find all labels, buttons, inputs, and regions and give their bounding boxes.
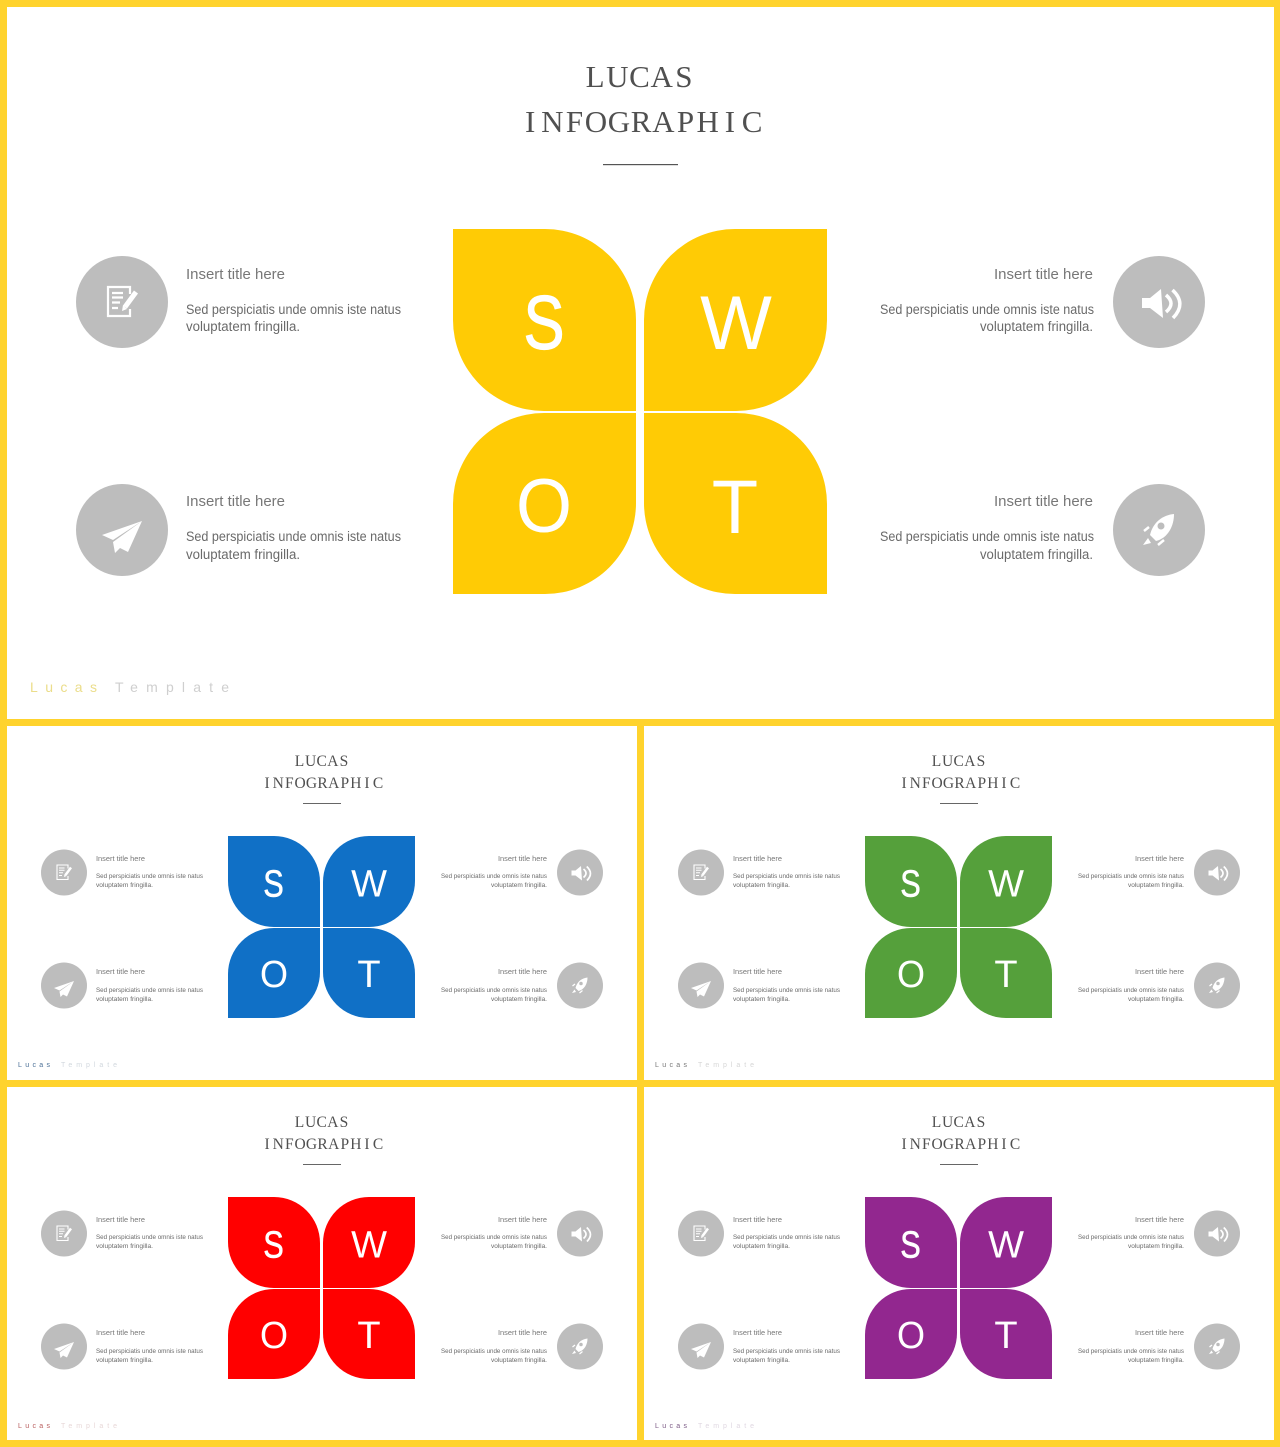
SWOT flower: O xyxy=(516,464,572,549)
text block: top left xyxy=(186,266,401,334)
text block: bottom right: Sed perspiciatis unde omnis iste natus xyxy=(1078,987,1185,994)
text block: bottom left: Insert title here xyxy=(96,1328,145,1337)
SWOT flower: O xyxy=(260,1315,288,1357)
SWOT flower: W xyxy=(351,864,387,906)
title: INFOGRAPHIC xyxy=(902,775,1020,792)
text block: bottom left xyxy=(96,967,204,1003)
text block: bottom left: voluptatem fringilla. xyxy=(96,1357,153,1364)
text block: top right: voluptatem fringilla. xyxy=(491,882,547,889)
footer: Template xyxy=(61,1423,117,1430)
title xyxy=(264,1114,383,1153)
text block: bottom left: Sed perspiciatis unde omnis iste natus xyxy=(96,987,204,994)
text block: top right xyxy=(441,854,548,889)
SWOT flower xyxy=(453,229,827,594)
footer xyxy=(18,1423,117,1430)
icon: document and pen xyxy=(76,256,168,348)
icon: paper plane xyxy=(678,962,724,1008)
text block: top left xyxy=(96,854,204,889)
text block: top left: Insert title here xyxy=(733,854,782,863)
SWOT flower xyxy=(228,1197,415,1379)
text block: bottom right: voluptatem fringilla. xyxy=(491,1357,547,1364)
footer: Template xyxy=(61,1062,117,1069)
text block: bottom right xyxy=(441,967,548,1003)
footer xyxy=(18,1062,117,1069)
SWOT flower xyxy=(228,836,415,1018)
text block: top left xyxy=(96,1215,204,1250)
text block: top right: Sed perspiciatis unde omnis iste natus xyxy=(1078,1234,1185,1241)
text block: bottom right: Sed perspiciatis unde omnis iste natus xyxy=(441,1348,548,1355)
title: LUCAS xyxy=(932,1114,985,1131)
text block: bottom right: voluptatem fringilla. xyxy=(980,547,1093,562)
text block: top right: Insert title here xyxy=(498,1215,547,1224)
icon: document and pen xyxy=(678,850,724,896)
title: LUCAS xyxy=(295,753,348,770)
footer xyxy=(655,1423,754,1430)
SWOT flower xyxy=(865,836,1052,1018)
text block: top left: Sed perspiciatis unde omnis iste natus xyxy=(96,873,204,880)
text block: top left xyxy=(733,1215,841,1250)
title xyxy=(264,753,383,792)
title: INFOGRAPHIC xyxy=(264,1136,383,1153)
text block: bottom left: voluptatem fringilla. xyxy=(96,996,153,1003)
title xyxy=(902,1114,1020,1153)
SWOT flower: W xyxy=(988,1224,1024,1266)
SWOT flower: S xyxy=(263,864,284,906)
text block: top left: Insert title here xyxy=(96,854,145,863)
text block: top right: Insert title here xyxy=(1135,854,1184,863)
text block: top right xyxy=(1078,854,1185,889)
icon: speaker xyxy=(557,850,603,896)
text block: bottom right: voluptatem fringilla. xyxy=(1128,1357,1184,1364)
text block: top right: voluptatem fringilla. xyxy=(980,319,1093,334)
text block: bottom left: Sed perspiciatis unde omnis iste natus xyxy=(186,529,401,544)
text block: top right: Insert title here xyxy=(498,854,547,863)
SWOT flower: S xyxy=(900,1224,921,1266)
text block: bottom right: Insert title here xyxy=(1135,1328,1184,1337)
SWOT flower: T xyxy=(712,465,758,550)
text block: bottom left: Sed perspiciatis unde omnis iste natus xyxy=(733,1348,841,1355)
text block: bottom right: Sed perspiciatis unde omnis iste natus xyxy=(441,987,548,994)
icon: rocket xyxy=(557,1324,603,1370)
title: LUCAS xyxy=(295,1114,348,1131)
SWOT flower: W xyxy=(700,281,772,366)
icon: rocket xyxy=(557,962,603,1008)
text block: bottom left: Insert title here xyxy=(733,1328,782,1337)
footer: Template xyxy=(698,1423,754,1430)
text block: top left: voluptatem fringilla. xyxy=(733,882,790,889)
text block: bottom left xyxy=(733,967,841,1003)
SWOT flower: T xyxy=(357,954,381,996)
text block: top right xyxy=(441,1215,548,1250)
text block: bottom right: Sed perspiciatis unde omnis iste natus xyxy=(1078,1348,1185,1355)
icon: document and pen xyxy=(41,1210,87,1256)
text block: top right: voluptatem fringilla. xyxy=(1128,1243,1184,1250)
footer: Lucas xyxy=(30,679,97,695)
text block: bottom right: Sed perspiciatis unde omnis iste natus xyxy=(880,529,1094,544)
SWOT flower: T xyxy=(994,954,1018,996)
footer: Template xyxy=(698,1062,754,1069)
text block: top left: voluptatem fringilla. xyxy=(733,1243,790,1250)
panel: blue slide xyxy=(7,726,637,1080)
icon: rocket xyxy=(1194,1324,1240,1370)
text block: bottom left xyxy=(733,1328,841,1364)
footer: Lucas xyxy=(18,1423,50,1430)
text block: bottom left xyxy=(186,493,401,562)
text block: top right: voluptatem fringilla. xyxy=(491,1243,547,1250)
SWOT flower: O xyxy=(897,954,925,996)
text block: bottom left: voluptatem fringilla. xyxy=(733,1357,790,1364)
text block: top right: Sed perspiciatis unde omnis iste natus xyxy=(441,873,548,880)
icon: paper plane xyxy=(41,962,87,1008)
text block: bottom right: Insert title here xyxy=(994,493,1093,510)
text block: top left: Sed perspiciatis unde omnis iste natus xyxy=(733,1234,841,1241)
text block: top right: Sed perspiciatis unde omnis iste natus xyxy=(880,302,1094,317)
SWOT flower: O xyxy=(897,1315,925,1357)
text block: top right: Sed perspiciatis unde omnis iste natus xyxy=(441,1234,548,1241)
title: INFOGRAPHIC xyxy=(264,775,383,792)
text block: bottom right xyxy=(880,493,1094,562)
text block: top left: voluptatem fringilla. xyxy=(96,1243,153,1250)
icon: rocket xyxy=(1113,484,1205,576)
text block: bottom left: voluptatem fringilla. xyxy=(733,996,790,1003)
text block: bottom right xyxy=(1078,1328,1185,1364)
SWOT flower: S xyxy=(263,1224,284,1266)
icon: speaker xyxy=(1194,1210,1240,1256)
icon: paper plane xyxy=(678,1324,724,1370)
panel: main yellow slide xyxy=(7,7,1274,719)
text block: top left xyxy=(733,854,841,889)
icon: speaker xyxy=(1194,850,1240,896)
SWOT flower: T xyxy=(994,1315,1018,1357)
icon: rocket xyxy=(1194,962,1240,1008)
text block: bottom right: Insert title here xyxy=(1135,967,1184,976)
text block: bottom right: voluptatem fringilla. xyxy=(1128,996,1184,1003)
text block: top left: Insert title here xyxy=(186,266,285,283)
SWOT flower: T xyxy=(357,1315,381,1357)
SWOT flower xyxy=(865,1197,1052,1379)
panel: red slide xyxy=(7,1087,637,1440)
text block: top left: Sed perspiciatis unde omnis iste natus xyxy=(96,1234,204,1241)
text block: bottom left: Sed perspiciatis unde omnis iste natus xyxy=(733,987,841,994)
icon: document and pen xyxy=(41,850,87,896)
footer xyxy=(30,679,229,695)
text block: top right: Insert title here xyxy=(994,266,1093,283)
text block: bottom left xyxy=(96,1328,204,1364)
footer: Lucas xyxy=(655,1423,688,1430)
main title: LUCAS xyxy=(586,59,693,94)
SWOT flower: S xyxy=(900,864,921,906)
text block: top right xyxy=(880,266,1094,334)
icon: paper plane xyxy=(76,484,168,576)
text block: top left: Insert title here xyxy=(733,1215,782,1224)
SWOT flower: O xyxy=(260,954,288,996)
panel: green slide xyxy=(644,726,1274,1080)
text block: top left: Sed perspiciatis unde omnis iste natus xyxy=(186,302,401,317)
SWOT flower: W xyxy=(351,1224,387,1266)
text block: top left: voluptatem fringilla. xyxy=(96,882,153,889)
footer xyxy=(655,1062,754,1069)
text block: bottom left: Insert title here xyxy=(733,967,782,976)
footer: Lucas xyxy=(18,1062,50,1069)
icon: paper plane xyxy=(41,1324,87,1370)
main title: INFOGRAPHIC xyxy=(525,104,762,139)
main title xyxy=(525,59,762,139)
footer: Lucas xyxy=(655,1062,688,1069)
text block: bottom left: Sed perspiciatis unde omnis iste natus xyxy=(96,1348,204,1355)
text block: top right: Insert title here xyxy=(1135,1215,1184,1224)
text block: top right xyxy=(1078,1215,1185,1250)
text block: bottom right: voluptatem fringilla. xyxy=(491,996,547,1003)
text block: bottom right: Insert title here xyxy=(498,1328,547,1337)
text block: bottom right: Insert title here xyxy=(498,967,547,976)
title: LUCAS xyxy=(932,753,985,770)
text block: top left: Sed perspiciatis unde omnis iste natus xyxy=(733,873,841,880)
panel: purple slide xyxy=(644,1087,1274,1440)
footer: Template xyxy=(115,679,229,695)
icon: speaker xyxy=(1113,256,1205,348)
SWOT flower: S xyxy=(524,281,564,366)
text block: top right: Sed perspiciatis unde omnis iste natus xyxy=(1078,873,1185,880)
text block: bottom right xyxy=(441,1328,548,1364)
icon: document and pen xyxy=(678,1210,724,1256)
icon: speaker xyxy=(557,1210,603,1256)
text block: bottom left: Insert title here xyxy=(96,967,145,976)
text block: bottom left: Insert title here xyxy=(186,493,285,510)
text block: bottom right xyxy=(1078,967,1185,1003)
SWOT flower: W xyxy=(988,864,1024,906)
title xyxy=(902,753,1020,792)
text block: bottom left: voluptatem fringilla. xyxy=(186,547,300,562)
title: INFOGRAPHIC xyxy=(902,1136,1020,1153)
text block: top right: voluptatem fringilla. xyxy=(1128,882,1184,889)
text block: top left: voluptatem fringilla. xyxy=(186,319,300,334)
text block: top left: Insert title here xyxy=(96,1215,145,1224)
